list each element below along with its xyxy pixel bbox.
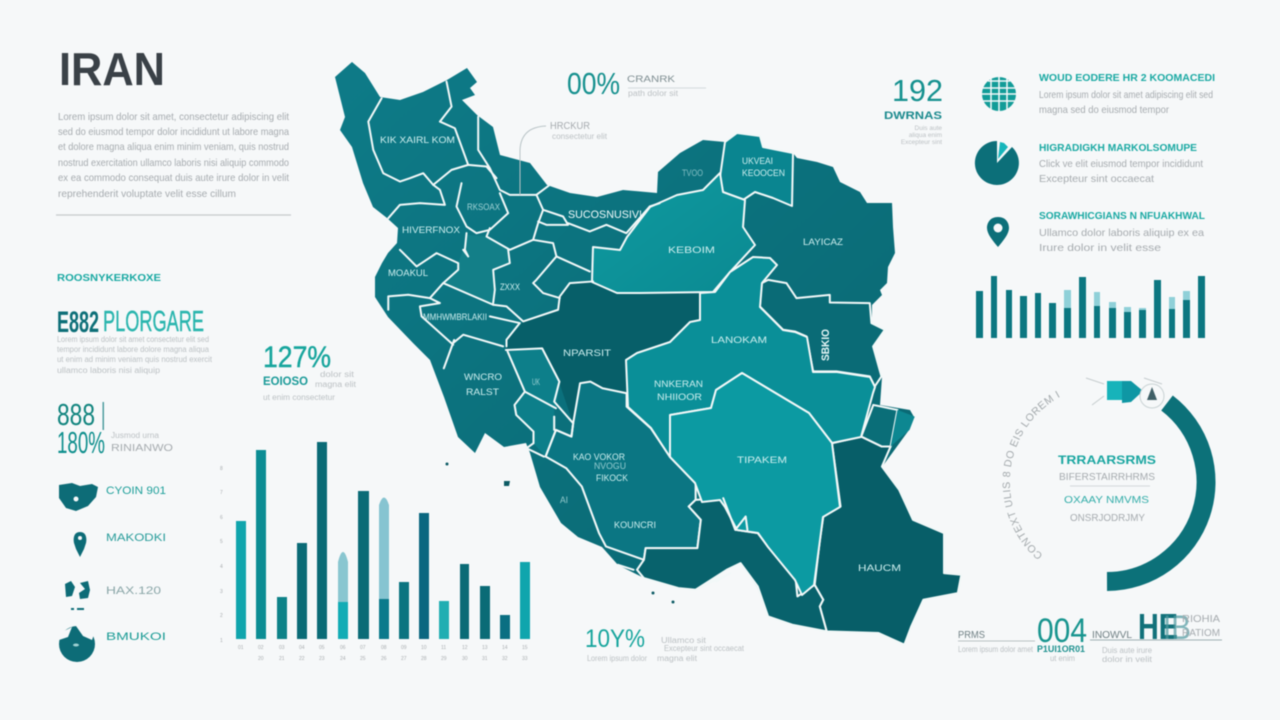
left stat heading: ROOSNYKERKOXE [57, 273, 161, 284]
bottom stat HE: Duis aute irure [1102, 646, 1153, 655]
feature text one [1039, 73, 1215, 116]
donut centre text: ONSRJODRJMY [1070, 512, 1145, 524]
bar chart: left: 10 [421, 645, 427, 651]
region: southern light [670, 373, 840, 595]
bar chart: left: 06 [340, 645, 346, 651]
region: mid north [443, 235, 510, 305]
stat 192 [884, 73, 943, 146]
callout: map leader [520, 120, 608, 195]
provincial borders: southwest [444, 340, 747, 590]
label: region four: BMUKOI [106, 631, 166, 643]
bottom stat HE: RATIOM [1182, 627, 1220, 639]
icon: globe [59, 626, 95, 662]
map place labels: KIK XAIRL KOM [380, 135, 455, 145]
feature text three: SORAWHICGIANS N NFUAKHWAL [1039, 211, 1205, 222]
curved caption around donut: CONTEXT ULIS 8 DO EIS LOREM IPSUM [1002, 390, 1060, 560]
provincial borders: northwest [368, 82, 660, 346]
bottom stat HE: HE [1138, 606, 1178, 647]
stat 192: aliqua enim [909, 132, 942, 139]
left big figure: E882 [57, 306, 99, 339]
map place labels: LAYICAZ [803, 237, 844, 247]
map place labels: HIVERFNOX [402, 225, 460, 235]
bar chart: left: 20 [258, 656, 264, 662]
bar chart: left: 04 [299, 645, 305, 651]
map place labels: NNKERAN [654, 379, 703, 389]
map place labels: TIPAKEM [737, 455, 787, 465]
map place labels: HAUCM [858, 563, 901, 573]
map place labels: RALST [466, 387, 500, 397]
bar chart: left: 4 [220, 564, 223, 570]
stat 00%: CRANRK [627, 74, 676, 85]
bar chart: left: 2 [220, 613, 223, 619]
bar chart: left: 3 [220, 589, 223, 595]
map outline base [335, 62, 961, 645]
feature text one: Lorem ipsum dolor sit amet adipiscing elit sed [1039, 89, 1213, 101]
bar chart: left: 6 [220, 515, 223, 521]
bottom stat 004: ut enim [1050, 654, 1075, 663]
map place labels: UKVEAI [742, 156, 773, 166]
intro text block [58, 111, 289, 200]
bottom stat 004: 004 [1037, 612, 1087, 650]
left figure description: Lorem ipsum dolor sit amet consectetur elit sed [57, 335, 209, 344]
region: south-east [815, 437, 961, 645]
map place labels: KEOOCEN [742, 168, 785, 178]
label: region two: MAKODKI [106, 532, 166, 544]
stats 888 and 180%: RINIANWO [111, 442, 173, 454]
bar chart: left: 03 [279, 645, 285, 651]
intro text block: nostrud exercitation ullamco laboris nisi aliquip commodo [58, 157, 289, 169]
bottom stat 004: P1UI1OR01 [1037, 644, 1085, 654]
stat 00%: 00% [567, 66, 620, 101]
bar chart: left: 14 [502, 645, 508, 651]
stat 127%: EOIOSO [263, 374, 308, 388]
stat 192: Duis aute [915, 125, 942, 132]
stat 127%: dolor sit [320, 370, 355, 379]
map place labels: NPARSIT [563, 348, 612, 358]
intro text block: sed do eiusmod tempor dolor incididunt ut labore magna [58, 126, 289, 138]
bottom stat HE [1090, 606, 1222, 664]
bar chart: left: 11 [441, 645, 446, 651]
bar chart: left: 7 [220, 490, 223, 496]
intro text block: ex ea commodo consequat duis aute irure dolor in velit [58, 172, 289, 184]
donut centre text [1058, 453, 1156, 524]
bar chart: left: 33 [522, 656, 528, 662]
donut chart [1002, 377, 1216, 592]
bottom stat 004: PRMS [958, 630, 985, 641]
donut arrow marker [1086, 378, 1164, 408]
bar chart: left: 01 [238, 645, 244, 651]
stat 127% [263, 341, 357, 402]
icon: scattered islands [65, 581, 90, 610]
map place labels: UK [532, 377, 540, 387]
stat 10Y%: Ullamco sit [661, 636, 707, 645]
feature text three: Irure dolor in velit esse [1039, 242, 1161, 254]
bar chart: left: 32 [502, 656, 508, 662]
bar chart: left: 30 [462, 656, 468, 662]
bottom stat 004 [958, 612, 1087, 663]
callout: map leader: HRCKUR [550, 120, 590, 132]
region: small western teal [508, 348, 559, 457]
map place labels: SUCOSNUSIV! [568, 209, 642, 221]
map place labels: ZXXX [500, 282, 520, 292]
region: south Khorasan [760, 280, 885, 386]
bar chart: left: 07 [360, 645, 366, 651]
icon: location pin [987, 217, 1009, 247]
islands [446, 462, 674, 604]
stat 192: Excepteur sint [901, 139, 942, 146]
map place labels: MOAKUL [388, 268, 428, 278]
stat 10Y%: 10Y% [585, 625, 645, 653]
bar chart: left: 08 [381, 645, 387, 651]
feature text three: Ullamco dolor laboris aliquip ex ea [1039, 227, 1204, 239]
bar chart: left: 13 [482, 645, 488, 651]
icon: grid globe [982, 77, 1016, 111]
stat 127%: 127% [263, 341, 331, 374]
feature text one: magna sed do eiusmod tempor [1039, 104, 1169, 116]
stat 192: 192 [892, 73, 943, 108]
feature text three [1039, 211, 1205, 254]
bottom stat 004: Lorem ipsum dolor amet [958, 645, 1034, 654]
bar chart: left: 12 [462, 645, 468, 651]
donut centre text: TRRAARSRMS [1058, 453, 1156, 467]
region: eastern tail [861, 405, 915, 447]
stat 127%: magna elit [315, 380, 357, 389]
bar chart: left: 21 [279, 656, 285, 662]
region: south dark band [637, 498, 827, 631]
region: Semnan light [592, 173, 755, 293]
map place labels: MMHWMBRLAKII [423, 312, 487, 322]
bar chart: left: 8 [220, 466, 223, 472]
map place labels [380, 135, 901, 573]
bar chart: left: 1 [220, 638, 223, 644]
stats 888 and 180%: Jusmod urna [111, 431, 160, 440]
donut centre text: OXAAY NMVMS [1064, 494, 1149, 506]
icon: region blob [59, 483, 98, 511]
bar chart: left: 29 [441, 656, 447, 662]
map place labels: KEBOIM [668, 245, 715, 255]
map place labels: WNCRO [464, 372, 502, 382]
left figure description [57, 335, 213, 375]
map place labels: LANOKAM [711, 335, 767, 345]
bar chart: left: 27 [401, 656, 407, 662]
left big figure: PLORGARE [103, 306, 204, 338]
bar chart: left: 25 [360, 656, 366, 662]
map place labels: RKSOAX [467, 202, 500, 212]
bar chart: left: 26 [381, 656, 387, 662]
bar chart: left: 05 [319, 645, 325, 651]
stat 10Y%: Excepteur sint occaecat [664, 644, 745, 653]
bottom stat HE: IB [1163, 609, 1191, 647]
icon: pie chart [975, 141, 1019, 185]
map place labels: KOUNCRI [614, 520, 656, 530]
feature text two: Click ve elit eiusmod tempor incididunt [1039, 158, 1203, 170]
title: IRAN [59, 43, 165, 95]
bottom stat HE: dolor in velit [1102, 655, 1153, 664]
intro text block: Lorem ipsum dolor sit amet, consectetur adipiscing elit [58, 111, 289, 123]
map place labels: NHIIOOR [657, 392, 703, 402]
bar chart: left: 02 [258, 645, 264, 651]
stat 10Y% [585, 625, 745, 663]
left big figure [57, 306, 204, 339]
bar chart: left: 5 [220, 539, 223, 545]
map of Iran [335, 62, 961, 645]
bottom stat HE: INOWVL [1092, 630, 1132, 641]
stat 10Y%: Lorem ipsum dolor [587, 654, 647, 663]
left figure description: tempor incididunt labore dolore magna aliqua [57, 345, 210, 354]
stat 00%: path dolor sit [628, 89, 679, 98]
feature text one: WOUD EODERE HR 2 KOOMACEDI [1039, 73, 1215, 84]
bar chart: right [976, 276, 1205, 338]
feature text two: HIGRADIGKH MARKOLSOMUPE [1039, 143, 1197, 154]
stat 00% [567, 66, 706, 101]
left figure description: ut enim ad minim veniam quis nostrud exercit [57, 355, 213, 364]
bar chart: left: 22 [299, 656, 305, 662]
map place labels: FIKOCK [596, 473, 628, 483]
bar chart: left: 28 [421, 656, 427, 662]
callout: map leader: consectetur elit [552, 132, 608, 141]
region: central light [626, 257, 875, 457]
map place labels: NVOGU [594, 461, 626, 471]
map place labels: TVOO [682, 168, 703, 178]
intro text block: reprehenderit voluptate velit esse cillum [58, 188, 236, 200]
feature text two [1039, 143, 1203, 185]
bar chart: left: 24 [340, 656, 346, 662]
bar chart: left: 15 [522, 645, 528, 651]
bar chart: left: 23 [319, 656, 325, 662]
map place labels: AI [560, 495, 568, 505]
stat 192: DWRNAS [884, 110, 942, 122]
intro text block: et dolore magna aliqua enim minim veniam, quis nostrud [58, 141, 289, 153]
region: north teal [720, 133, 793, 206]
label: region three: HAX.120 [106, 585, 161, 597]
bar chart: left [220, 442, 530, 662]
map place labels: KAO VOKOR [573, 452, 625, 462]
bottom stat HE: RIOHIA [1182, 613, 1220, 625]
left figure description: ullamco laboris nisi aliquip [57, 366, 161, 375]
stat 127%: ut enim consectetur [263, 393, 335, 402]
feature text two: Excepteur sint occaecat [1039, 173, 1154, 185]
bar chart: left: 09 [401, 645, 407, 651]
stats 888 and 180% [57, 397, 173, 460]
icon: small pin blob [74, 532, 86, 557]
stats 888 and 180%: 888 [57, 397, 95, 432]
region: central dark [506, 282, 700, 423]
label: region one: CYOIN 901 [106, 485, 166, 497]
donut centre text: BIFERSTAIRRHRMS [1059, 471, 1155, 483]
map place labels: SBKIO [820, 329, 832, 361]
stat 10Y%: magna elit [657, 654, 698, 663]
bar chart: left: 31 [482, 656, 488, 662]
region: southern mid teal [546, 382, 701, 560]
stats 888 and 180%: 180% [57, 425, 105, 460]
